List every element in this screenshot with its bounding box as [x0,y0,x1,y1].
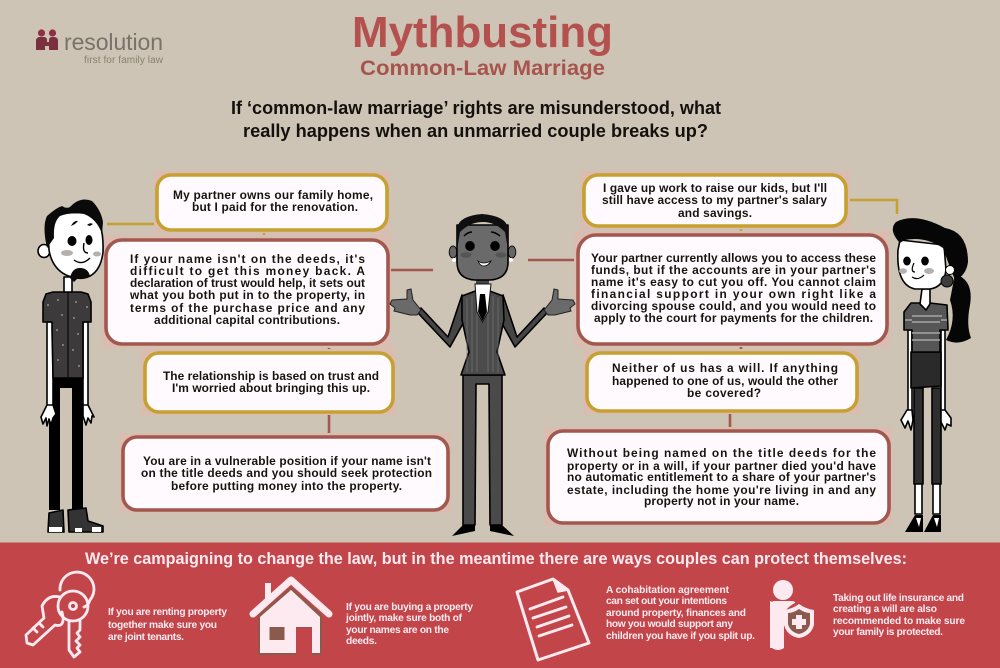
head [898,240,946,289]
panel: right question 2: happened to one of us, would the other [612,374,838,388]
text: joint tenants: If you are renting property [108,607,227,618]
smile [478,261,491,266]
smile and beard [74,243,90,263]
shoes [48,510,64,532]
ear [38,244,50,258]
text: property jointly [345,602,473,647]
icon: person with shield [770,580,814,650]
neck [64,277,72,292]
text: property jointly: deeds. [346,636,377,647]
question heading: really happens when an unmarried couple breaks up? [243,121,708,141]
panel: right answer 2: property not in your name. [644,494,799,508]
panel: left question 1: My partner owns our family home, [173,188,373,202]
hair [457,214,508,250]
eyes and brows [465,241,500,251]
text: cohabitation agreement: A cohabitation agreement [606,585,730,596]
hands [901,410,951,430]
panel: left answer 2 [119,433,451,513]
subtitle: Common-Law Marriage [360,57,605,80]
banner heading: We’re campaigning to change the law, but in the meantime there are ways couples can protect themselves: [85,549,907,568]
icon: house [253,580,329,655]
panel: right answer 1: funds, but if the accounts are in your partner's [591,263,876,277]
shirt and tie [475,284,491,322]
panel: right answer 2: property or in a will, if your partner died you'd have [567,459,876,473]
panel: left answer 1: difficult to get this money back. A [130,264,365,278]
icon: document [517,579,589,660]
panel: left question 2: I'm worried about bringing this up. [172,381,370,395]
panel: right answer 1: financial support in your own right like a [591,287,876,301]
eyes and eyebrows [68,221,93,246]
character: woman on right [893,218,971,532]
text: property jointly: jointly, make sure both of [345,613,463,624]
text: life insurance [833,593,965,638]
panel: right question 2: be covered? [687,386,761,400]
text: property jointly: your names are on the [346,625,449,636]
text: cohabitation agreement: how you would support any [606,619,733,630]
text: joint tenants: together make sure you [108,620,217,631]
question heading: If ‘common-law marriage’ rights are misunderstood, what [231,98,721,118]
text: joint tenants [108,607,227,643]
text: life insurance: your family is protected. [833,627,943,638]
text: cohabitation agreement: can set out your intentions [606,596,727,607]
shoes [452,525,514,536]
logo: resolution [36,29,164,66]
panel: left question 2: The relationship is based on trust and [163,369,379,383]
panel: right question 2 [583,349,860,414]
cheeks [460,252,506,258]
shirt [43,292,91,378]
panel: right question 1 [580,171,850,229]
panel: left answer 1: what you both put in to the property, in [129,288,365,302]
panel: left answer 1 [102,235,391,348]
ears [449,246,516,258]
earring [941,275,953,287]
neck [476,276,489,286]
ponytail [946,274,971,343]
neck [920,289,930,310]
question heading [231,98,721,141]
text: cohabitation agreement [606,585,755,642]
hair [44,199,103,248]
icon: keys [26,572,94,657]
panel: right answer 1: apply to the court for payments for the children. [594,311,873,325]
connector lines [107,200,897,437]
ear [946,266,954,274]
jacket [461,290,505,375]
panel: right answer 1: Your partner currently allows you to access these [591,251,876,265]
socks [915,484,940,514]
panel: left answer 2: on the title deeds and you should seek protection [141,466,432,480]
text: property jointly: If you are buying a property [346,602,473,613]
logo: resolution: resolution [64,29,163,55]
eyes [903,256,929,266]
legs [463,375,502,525]
panel: right question 2: Neither of us has a will. If anything [612,361,838,375]
panel: right answer 1 [574,231,890,347]
text: cohabitation agreement: children you have if you split up. [606,631,755,642]
panel: left answer 1: If your name isn't on the deeds, it's [130,252,365,266]
panel: right answer 2 [544,427,892,526]
character: lawyer in centre [390,214,575,536]
cheeks [899,268,934,274]
panel: right question 1: still have access to my partner's salary [602,193,827,207]
panel: left answer 1: declaration of trust would help, it sets out [130,276,365,290]
legs [914,388,941,484]
text: joint tenants: are joint tenants. [108,632,184,643]
text: cohabitation agreement: around property, finances and [606,608,746,619]
head [457,225,508,280]
hands [390,289,421,315]
head [48,212,103,278]
panel: right answer 2: no automatic entitlement to a share of your partner's [567,470,876,484]
panel: right question 1: and savings. [678,206,752,220]
logo: resolution: first for family law [84,55,164,66]
skirt [911,352,941,388]
panel: bottom banner [0,542,1000,668]
text: life insurance: creating a will are also [833,604,937,615]
text: life insurance: Taking out life insurance and [833,593,964,604]
panel: right question 1: I gave up work to raise our kids, but I'll [603,181,827,195]
hair [893,218,968,280]
panel: left question 2 [141,349,396,415]
hands [41,405,94,426]
panel: left answer 1: terms of the purchase price and any [130,301,365,315]
top [904,303,948,352]
arms [908,330,945,412]
shoes [905,515,941,532]
text: life insurance: recommended to make sure [833,616,965,627]
panel: right answer 1: name it's easy to cut you off. You cannot claim [591,275,876,289]
panel: left answer 2: before putting money into the property. [171,479,402,493]
arms [418,295,466,347]
panel: right answer 1: divorcing spouse could, and you would need to [591,299,876,313]
panel: left answer 2: You are in a vulnerable position if your name isn't [143,454,431,468]
arms [47,322,88,406]
character: man on left [38,199,103,532]
legs [49,377,83,510]
cheeks [61,250,101,256]
smile [912,263,924,279]
panel: left question 1 [154,171,390,233]
panel: right answer 2: Without being named on the title deeds for the [567,446,876,460]
panel: right answer 2: estate, including the home you're living in and any [567,483,876,497]
title: Mythbusting [352,8,613,57]
panel: left answer 1: additional capital contributions. [154,313,340,327]
panel: left question 1: but I paid for the renovation. [192,200,358,214]
